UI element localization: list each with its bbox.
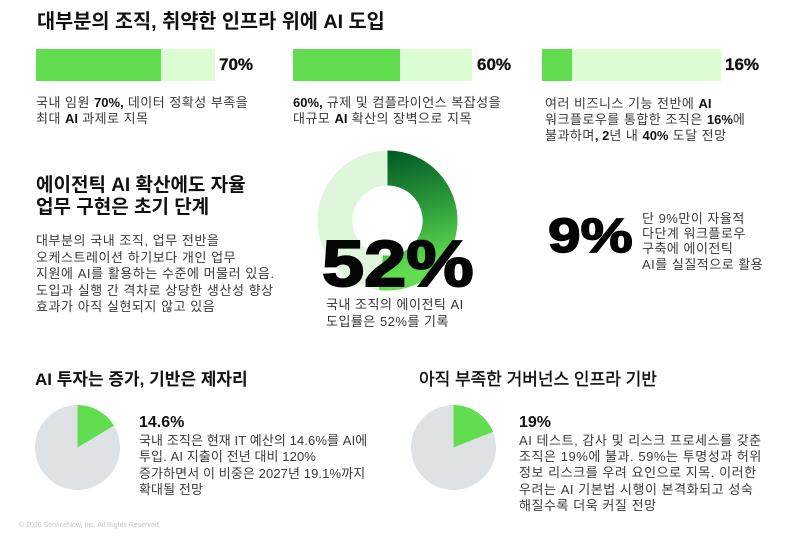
text: 14.6% description: 투입. AI 지출이 전년 대비 120% [139,449,316,464]
text: agentic AI description: 효과가 아직 실현되지 않고 있음 [36,299,215,314]
text: 14.6% description: 증가하면서 이 비중은 2027년 19.1%까지 [139,466,365,481]
text: 16% description [545,96,745,143]
text: 14.6% description: 확대될 전망 [139,482,203,497]
text: 52% description: 도입률은 52%를 기록 [326,314,449,329]
stat: 14.6%: 14.6% [139,414,184,431]
title: 대부분의 조직, 취약한 인프라 위에 AI 도입 [37,11,385,33]
text: 19% description: 해질수록 더욱 커질 전망 [519,498,657,513]
text: 70% description: 최대 AI 과제로 지목 [36,111,149,126]
text: agentic AI description: 도입과 실행 간 격차로 상당한 생산성 향상 [36,282,274,298]
bar chart: 70%: 70% [219,55,253,74]
text: 60% description [293,95,501,126]
bar chart: 70% [36,49,253,81]
bar chart: 60% [293,49,511,81]
text: 19% description [519,433,762,513]
text: 52% description [326,297,464,329]
text: 9% description [642,211,763,272]
text: 19% description: 정보 리스크를 우려 요인으로 지목. 이러한 [519,465,757,480]
text: agentic AI description: 오케스트레이션 하기보다 개인 업무 [36,250,236,264]
text: 19% description: AI 테스트, 감사 및 리스크 프로세스를 갖춘 [519,433,762,448]
text: 70% description: 국내 임원 70%, 데이터 정확성 부족을 [36,95,248,110]
text: 14.6% description: 국내 조직은 현재 IT 예산의 14.6%를 AI에 [139,433,367,448]
text: 60% description: 60%, 규제 및 컴플라이언스 복잡성을 [293,95,501,110]
bar chart: 60%: 60% [477,55,511,74]
donut chart: 52% [318,150,458,290]
text: 9% description: 단 9%만이 자율적 [642,211,745,226]
text: agentic AI description: 지원에 AI를 활용하는 수준에 머물러 있음. [36,266,275,281]
text: 60% description: 대규모 AI 확산의 장벽으로 지목 [293,111,472,126]
footer copyright: © 2026 ServiceNow, Inc. All Rights Reserved. [19,522,161,529]
bar chart: 16%: 16% [725,55,759,74]
text: 9% description: 다단계 워크플로우 [642,226,746,241]
bar chart: 16% [542,49,759,81]
text: 19% description: 조직은 19%에 불과. 59%는 투명성과 허위 [519,449,762,464]
text: agentic AI description: 대부분의 국내 조직, 업무 전반을 [36,233,219,248]
heading: agentic AI: 업무 구현은 초기 단계 [36,197,209,218]
heading: agentic AI: 에이전틱 AI 확산에도 자율 [36,175,246,196]
heading: governance: 아직 부족한 거버넌스 인프라 기반 [419,370,657,389]
stat: 19% [519,414,762,513]
text: 9% description: 구축에 에이전틱 [642,241,733,256]
text: 16% description: 여러 비즈니스 기능 전반에 AI [545,96,712,111]
text: 9% description: AI를 실질적으로 활용 [642,256,763,272]
text: agentic AI description [36,233,275,314]
text: 16% description: 워크플로우를 통합한 조직은 16%에 [545,112,745,127]
stat: 19%: 19% [519,414,551,431]
text: 52% description: 국내 조직의 에이전틱 AI [326,297,464,312]
heading: agentic AI [36,175,246,218]
text: 16% description: 불과하며, 2년 내 40% 도달 전망 [545,128,727,143]
heading: AI investment: AI 투자는 증가, 기반은 제자리 [35,370,248,389]
pie chart: 14.6% [35,405,120,490]
big number: 9%: 9% [548,210,633,263]
stat: 14.6% [139,414,367,497]
text: 19% description: 우려는 AI 기본법 시행이 본격화되고 성숙 [519,482,753,497]
pie chart: 19% [411,405,496,490]
text: 70% description [36,95,248,126]
big number: 52%: 52% [322,227,474,300]
text: 14.6% description [139,433,367,497]
